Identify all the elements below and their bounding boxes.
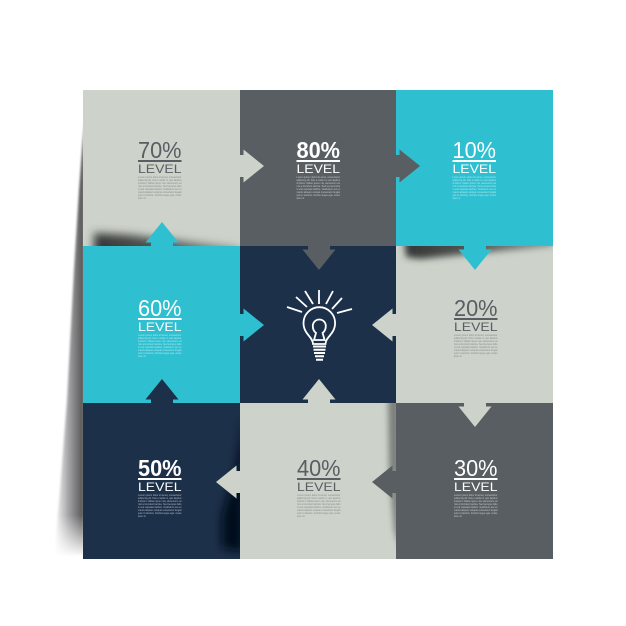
fold shadow: under 10% [400,246,553,264]
fold shadow: beside 30% [384,403,396,546]
text block: 50%: tincidunt. Nullam ipsum nisi, elementum vel [138,499,182,503]
text block: 50%: Lorem ipsum dolor sit amet, consectetur [138,493,182,497]
text block: 80%: LEVEL [296,164,341,176]
fold shadow: beside 40% [222,415,243,552]
outer drop shadow on the left [56,126,83,554]
arrow: 80 to centre [302,246,336,270]
panel: 50% [83,403,240,559]
text block: 40%: 40% [297,455,340,481]
text block: 10%: ipsum id. [452,196,461,200]
text block: 30%: Lorem ipsum dolor sit amet, consectetur [454,493,498,497]
text block: 10%: nisi a tincidunt lacinia. Sed tempus felis [452,184,496,188]
text block: 50% [138,455,182,518]
text block: 70%: tincidunt. Nullam ipsum nisi, elementum vel [138,181,182,185]
text block: 40%: Lorem ipsum dolor sit amet, consectetur [297,493,340,497]
infographic: puzzle square [56,90,553,559]
text block: 60% [138,295,182,358]
text block: 20%: 20% [454,295,498,321]
text block: 20%: nisi a tincidunt lacinia. Sed tempus felis [454,342,498,346]
text block: 30%: mauris aliquam volutpat consectetur feugiat [454,508,498,512]
panel: 20% [396,246,553,403]
arrow: 60 to centre [240,308,264,342]
text block: 10%: tincidunt. Nullam ipsum nisi, elementum vel [452,181,496,185]
text block: 50%: LEVEL [138,482,182,494]
arrow: 70 to 80 [240,150,264,182]
arrow: 20 to centre [372,308,396,342]
text block: 30%: adipiscing elit. Duis a mattis mi, quis dapibus [454,496,498,500]
icon: light bulb [287,290,352,360]
text block: 20%: Lorem ipsum dolor sit amet, consectetur [454,333,498,337]
arrow: 50 to 60 [146,379,178,403]
text block: 50%: adipiscing elit. Duis a mattis mi, quis dapibus [138,496,182,500]
text block: 70% [138,137,182,200]
text block: 10% [452,137,497,200]
arrow: 40 to 50 [216,466,240,498]
text block: 20%: in erat vulputate facilisis. Vestibulum nec ex [454,345,498,349]
text block: 60%: 60% [138,295,182,321]
text block: 70%: 70% [138,137,182,163]
text block: 50%: mauris aliquam volutpat consectetur feugiat [138,508,182,512]
text block: 80%: nisi a tincidunt lacinia. Sed tempus felis [296,184,340,188]
panel: 30% [396,403,553,559]
text block: 20%: tincidunt. Nullam ipsum nisi, elementum vel [454,339,498,343]
arrow: 30 to 40 [372,466,396,498]
text block: 50%: ipsum id. [138,514,146,518]
text block: 60%: quis mi interdum, tincidunt augue eget, ornare [138,351,182,355]
text block: 70%: adipiscing elit. Duis a mattis mi, quis dapibus [138,178,182,182]
text block: 80%: in erat vulputate facilisis. Vestibulum nec ex [296,187,340,191]
text block: 10%: LEVEL [452,164,497,176]
text block: 50%: 50% [138,455,182,481]
text block: 60%: in erat vulputate facilisis. Vestibulum nec ex [138,345,182,349]
panel: 70% [83,90,240,246]
text block: 80%: quis mi interdum, tincidunt augue eget, ornare [296,193,340,197]
text block: 30%: ipsum id. [454,514,462,518]
arrow: 60 to 70 [146,222,178,246]
panel: centre [240,246,396,403]
text block: 30%: nisi a tincidunt lacinia. Sed tempus felis [454,502,498,506]
text block: 20% [454,295,498,358]
text block: 60%: LEVEL [138,322,182,334]
text block: 10%: quis mi interdum, tincidunt augue eget, ornare [452,193,496,197]
text block: 50%: quis mi interdum, tincidunt augue eget, ornare [138,511,182,515]
panel: 10% [396,90,553,246]
text block: 80% [296,137,341,200]
arrow: 10 to 20 [458,246,492,270]
arrow: 80 to 10 [396,150,420,182]
arrow: 20 to 30 [458,403,492,427]
fold shadow: under 70% [86,226,240,246]
text block: 40%: nisi a tincidunt lacinia. Sed tempus felis [297,502,341,506]
text block: 50%: nisi a tincidunt lacinia. Sed tempus felis [138,502,182,506]
text block: 70%: nisi a tincidunt lacinia. Sed tempus felis [138,184,182,188]
text block: 40%: in erat vulputate facilisis. Vestibulum nec ex [297,505,341,509]
text block: 60%: nisi a tincidunt lacinia. Sed tempus felis [138,342,182,346]
text block: 70%: ipsum id. [138,196,146,200]
text block: 80%: 80% [296,137,340,163]
text block: 40%: LEVEL [297,482,341,494]
text block: 60%: Lorem ipsum dolor sit amet, consectetur [138,333,182,337]
text block: 40%: adipiscing elit. Duis a mattis mi, quis dapibus [297,496,341,500]
text block: 30%: LEVEL [454,482,498,494]
text block: 20%: mauris aliquam volutpat consectetur feugiat [454,348,498,352]
text block: 60%: tincidunt. Nullam ipsum nisi, elementum vel [138,339,182,343]
text block: 30%: in erat vulputate facilisis. Vestibulum nec ex [454,505,498,509]
text block: 60%: ipsum id. [138,354,146,358]
text block: 10%: 10% [452,137,496,163]
text block: 30%: quis mi interdum, tincidunt augue eget, ornare [454,511,498,515]
text block: 30%: tincidunt. Nullam ipsum nisi, elementum vel [454,499,498,503]
text block: 80%: Lorem ipsum dolor sit amet, consectetur [296,175,340,179]
text block: 80%: adipiscing elit. Duis a mattis mi, quis dapibus [296,178,340,182]
text block: 80%: tincidunt. Nullam ipsum nisi, elementum vel [296,181,340,185]
text block: 10%: adipiscing elit. Duis a mattis mi, quis dapibus [452,178,496,182]
text block: 10%: mauris aliquam volutpat consectetur feugiat [452,190,496,194]
text block: 70%: Lorem ipsum dolor sit amet, consectetur [138,175,182,179]
panel: 60% [83,246,240,403]
text block: 20%: LEVEL [454,322,498,334]
text block: 70%: mauris aliquam volutpat consectetur feugiat [138,190,182,194]
text block: 20%: ipsum id. [454,354,462,358]
text block: 70%: in erat vulputate facilisis. Vestibulum nec ex [138,187,182,191]
text block: 20%: quis mi interdum, tincidunt augue eget, ornare [454,351,498,355]
text block: 40%: ipsum id. [297,514,305,518]
text block: 10%: in erat vulputate facilisis. Vestibulum nec ex [452,187,496,191]
text block: 80%: ipsum id. [296,196,305,200]
text block: 60%: adipiscing elit. Duis a mattis mi, quis dapibus [138,336,182,340]
text block: 70%: LEVEL [138,164,182,176]
panel: 80% [240,90,396,246]
text block: 50%: in erat vulputate facilisis. Vestibulum nec ex [138,505,182,509]
text block: 10%: Lorem ipsum dolor sit amet, consectetur [452,175,496,179]
arrow: 40 to centre [302,379,336,403]
text block: 20%: adipiscing elit. Duis a mattis mi, quis dapibus [454,336,498,340]
text block: 30%: 30% [454,455,498,481]
panel: 40% [240,403,396,559]
text block: 80%: mauris aliquam volutpat consectetur feugiat [296,190,340,194]
text block: 40%: tincidunt. Nullam ipsum nisi, elementum vel [297,499,341,503]
text block: 30% [454,455,498,518]
text block: 70%: quis mi interdum, tincidunt augue eget, ornare [138,193,182,197]
text block: 60%: mauris aliquam volutpat consectetur feugiat [138,348,182,352]
text block: 40% [297,455,341,518]
text block: 40%: quis mi interdum, tincidunt augue eget, ornare [297,511,341,515]
text block: 40%: mauris aliquam volutpat consectetur feugiat [297,508,341,512]
